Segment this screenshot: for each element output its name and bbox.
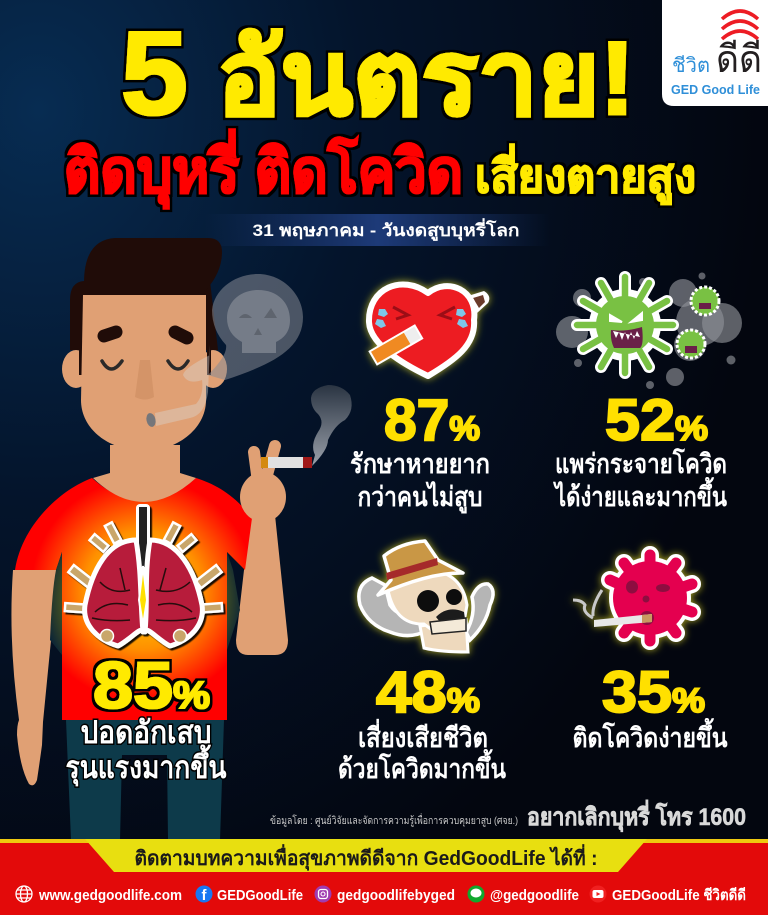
logo: ชีวิต — [672, 55, 710, 77]
label: harder to recover — [350, 449, 490, 514]
date ribbon: 31 พฤษภาคม - วันงดสูบบุหรี่โลก — [252, 218, 520, 242]
stat: 48 percent: 48% — [376, 660, 480, 725]
label: harder to recover: รักษาหายยาก — [350, 449, 490, 479]
mouth — [145, 412, 157, 428]
hair back — [70, 281, 218, 375]
logo: ดีดี — [716, 39, 762, 81]
icon: youtube — [590, 886, 606, 902]
label: higher covid death risk — [338, 718, 506, 784]
icon: red virus smoking — [573, 555, 692, 641]
label: higher covid death risk: เสี่ยงเสียชีวิต — [358, 718, 488, 753]
subtitle: high death risk: เสี่ยงตายสูง — [475, 144, 696, 205]
stat: 35 percent: 35% — [602, 660, 705, 725]
label: harder to recover: กว่าคนไม่สูบ — [358, 481, 482, 514]
subtitle: smoking and covid: ติดบุหรี่ ติดโควิด — [64, 129, 463, 209]
right arm — [236, 515, 288, 655]
logo — [662, 0, 768, 106]
icon: line — [468, 886, 484, 902]
follow banner — [85, 839, 647, 872]
eyebrows — [104, 332, 187, 338]
t-shirt — [15, 478, 252, 720]
footer band — [0, 839, 768, 915]
label: spreads covid more easily — [553, 447, 727, 512]
label: severe lung inflammation — [66, 715, 226, 787]
icon: crying heart with cigarette — [368, 284, 489, 376]
cigarette — [261, 457, 312, 468]
label: higher covid death risk: ด้วยโควิดมากขึ้น — [338, 748, 506, 784]
nose — [135, 360, 154, 400]
icon: green virus with smoke — [556, 272, 742, 389]
follow banner: ติดตามบทความเพื่อสุขภาพดีดีจาก GedGoodLife ได้ที่ : — [134, 843, 598, 871]
shirt side shadows — [50, 552, 240, 655]
stat: 87 percent: 87% — [384, 388, 480, 453]
smoke skull bubble — [208, 274, 303, 380]
line name: @gedgoodlife — [490, 887, 579, 904]
ears — [62, 350, 90, 388]
logo: GED Good Life — [671, 82, 760, 97]
icon: facebook: f — [202, 887, 208, 904]
label: severe lung inflammation: ปอดอักเสบ — [80, 715, 212, 750]
label: spreads covid more easily: แพร่กระจายโควิด — [555, 447, 727, 479]
title: 5 dangers: 5 อันตราย! — [121, 8, 635, 140]
label: severe lung inflammation: รุนแรงมากขึ้น — [66, 744, 226, 787]
quitline: อยากเลิกบุหรี่ โทร 1600 — [527, 799, 746, 833]
hand — [240, 385, 352, 522]
website: www.gedgoodlife.com — [38, 887, 182, 904]
virus spikes — [577, 277, 673, 373]
source note: ข้อมูลโดย : ศูนย์วิจัยและจัดการความรู้เพื่อการควบคุมยาสูบ (ศจย.) — [270, 813, 518, 827]
facebook name: GEDGoodLife — [217, 887, 303, 904]
label: easier to catch covid: ติดโควิดง่ายขึ้น — [572, 717, 728, 753]
exhaled smoke — [155, 345, 210, 426]
label: spreads covid more easily: ได้ง่ายและมากขึ้น — [553, 476, 727, 512]
neck — [93, 445, 196, 502]
smoking man illustration — [11, 238, 352, 840]
small virus top — [691, 287, 719, 315]
lungs with cigarettes — [65, 504, 222, 646]
stat: 52 percent: 52% — [605, 388, 708, 453]
instagram name: gedgoodlifebyged — [337, 887, 455, 904]
icon: instagram — [314, 886, 332, 902]
lung cigarettes — [65, 522, 222, 613]
hair top — [84, 238, 222, 295]
left arm — [11, 570, 58, 785]
closed eyes — [102, 361, 188, 369]
small virus bottom — [677, 330, 705, 358]
smoke clouds — [556, 272, 742, 389]
icon: skull with hat smoking — [359, 541, 493, 652]
stat: 85 percent: 85% — [93, 648, 210, 722]
face — [81, 295, 206, 451]
icon: facebook — [196, 886, 212, 904]
trousers — [66, 720, 224, 840]
date ribbon — [205, 214, 550, 246]
cigarette smoke — [311, 385, 352, 466]
icon: globe — [16, 886, 32, 902]
youtube name: GEDGoodLife ชีวิตดีดี — [612, 886, 746, 904]
